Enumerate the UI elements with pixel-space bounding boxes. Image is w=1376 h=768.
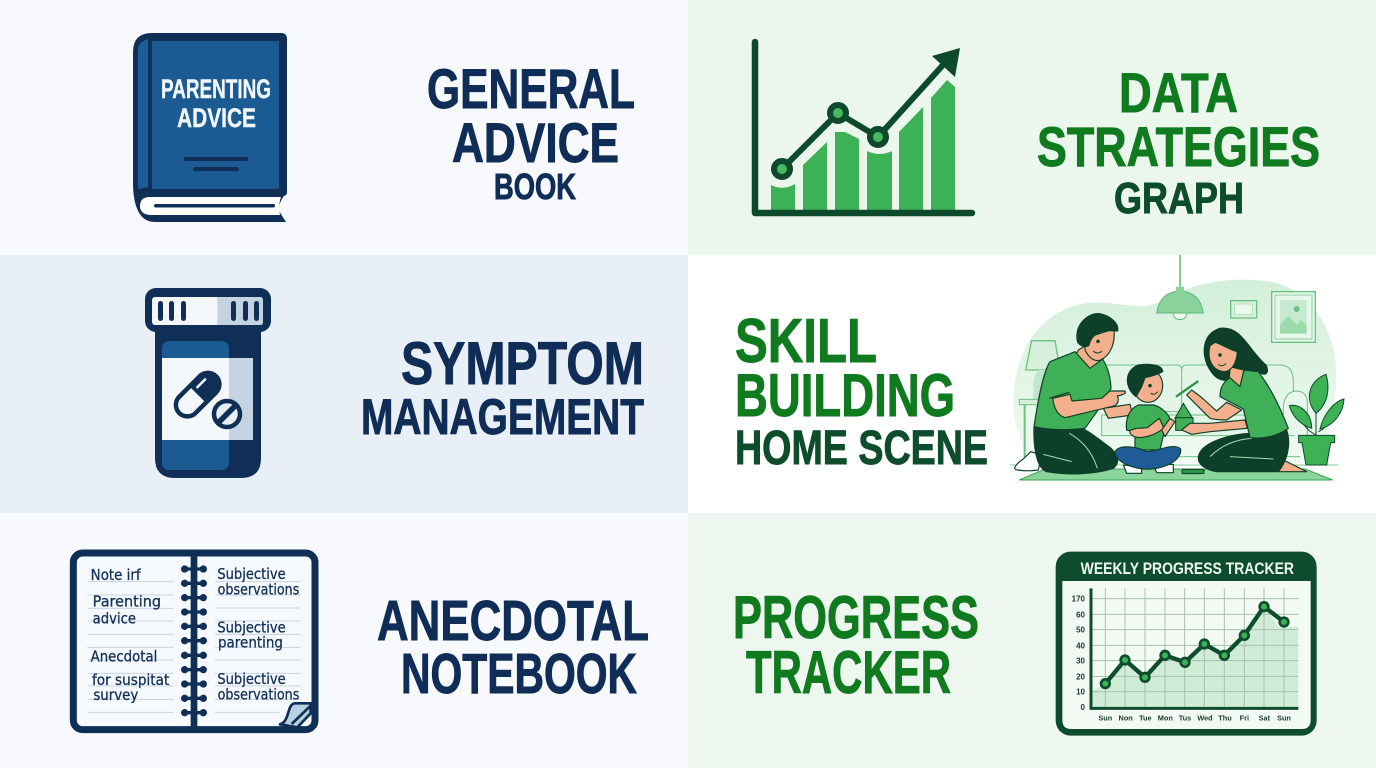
x axis labels: Thu	[1218, 714, 1232, 723]
heading: symptom management: SYMPTOM	[401, 330, 644, 397]
heading: progress tracker	[733, 584, 979, 706]
x axis labels: Sat	[1259, 714, 1271, 723]
y axis labels: 30	[1076, 657, 1086, 666]
handwritten notes: Parenting	[93, 593, 161, 611]
x axis labels: Wed	[1197, 714, 1213, 723]
heading: progress tracker: TRACKER	[746, 639, 951, 706]
icon: parenting advice book: PARENTING	[161, 74, 271, 104]
y axis labels: 170	[1072, 595, 1086, 604]
heading: anecdotal notebook: NOTEBOOK	[401, 642, 637, 706]
rug	[1019, 469, 1333, 480]
child	[1115, 364, 1181, 473]
icon: rising bar and line graph	[755, 42, 972, 213]
icon: spiral notebook with handwritten notes	[73, 550, 315, 733]
y axis labels: 20	[1076, 672, 1086, 681]
heading: symptom management	[361, 330, 644, 445]
panel: symptom management	[0, 255, 688, 513]
x axis labels: Non	[1119, 714, 1133, 723]
handwritten notes: Note irf	[91, 566, 141, 584]
father	[1015, 314, 1133, 474]
x axis labels: Sun	[1098, 714, 1113, 723]
panel: progress tracker	[688, 513, 1376, 768]
handwritten notes: observations	[218, 580, 299, 598]
heading: skill building home scene: SKILL	[735, 307, 877, 376]
x axis labels: Tus	[1179, 714, 1191, 723]
handwritten notes	[91, 565, 299, 704]
x axis labels: Fri	[1240, 714, 1249, 723]
heading: skill building home scene	[735, 307, 988, 475]
panel: anecdotal notebook	[0, 513, 688, 768]
icon: parenting advice book	[133, 33, 287, 222]
illustration: family building a toy at home	[1010, 255, 1344, 480]
toy house	[1175, 403, 1193, 430]
handwritten notes: survey	[93, 686, 138, 704]
handwritten notes: parenting	[218, 634, 283, 652]
heading: skill building home scene: HOME SCENE	[735, 422, 988, 475]
icon: parenting advice book: ADVICE	[177, 103, 256, 133]
mother	[1176, 328, 1307, 472]
handwritten notes: for suspitat	[92, 671, 169, 689]
x axis labels: Sun	[1277, 714, 1291, 723]
y axis labels: 10	[1076, 688, 1086, 697]
heading: anecdotal notebook	[377, 589, 649, 706]
heading: anecdotal notebook: ANECDOTAL	[377, 589, 649, 653]
heading: general advice book	[427, 57, 635, 207]
room background	[1010, 255, 1338, 465]
icon: medicine bottle with pills	[145, 288, 271, 478]
handwritten notes: observations	[218, 685, 299, 703]
panel: general advice book	[0, 0, 688, 255]
y axis labels: 50	[1076, 626, 1086, 635]
x axis labels	[1098, 714, 1291, 723]
heading: skill building home scene: BUILDING	[735, 362, 955, 429]
y axis labels: 60	[1076, 610, 1086, 619]
heading: general advice book: ADVICE	[452, 111, 619, 174]
heading: data strategies graph: DATA	[1119, 61, 1238, 124]
heading: data strategies graph: GRAPH	[1114, 174, 1244, 223]
handwritten notes: Subjective	[217, 565, 286, 583]
heading: general advice book: GENERAL	[427, 57, 635, 120]
chart: weekly progress tracker	[1056, 552, 1317, 736]
chart title: WEEKLY PROGRESS TRACKER	[1081, 560, 1294, 578]
crayon on rug	[1182, 469, 1204, 474]
page curl	[280, 703, 311, 727]
handwritten notes: Subjective	[217, 618, 286, 636]
heading: progress tracker: PROGRESS	[733, 584, 979, 651]
x axis labels: Mon	[1158, 714, 1173, 723]
y axis labels: 40	[1076, 641, 1086, 650]
y axis labels	[1072, 595, 1086, 712]
x axis labels: Tue	[1139, 714, 1152, 723]
heading: general advice book: BOOK	[494, 166, 576, 207]
y axis labels: 0	[1081, 703, 1086, 712]
handwritten notes: Subjective	[217, 670, 286, 688]
panel: data strategies graph	[688, 0, 1376, 255]
handwritten notes: advice	[93, 609, 136, 627]
heading: data strategies graph	[1037, 61, 1320, 223]
handwritten notes: Anecdotal	[91, 648, 157, 666]
plant	[1289, 374, 1344, 465]
heading: symptom management: MANAGEMENT	[361, 389, 644, 445]
progress line	[1101, 602, 1288, 688]
panel: skill building home scene	[688, 255, 1376, 513]
area under line	[1091, 607, 1298, 708]
